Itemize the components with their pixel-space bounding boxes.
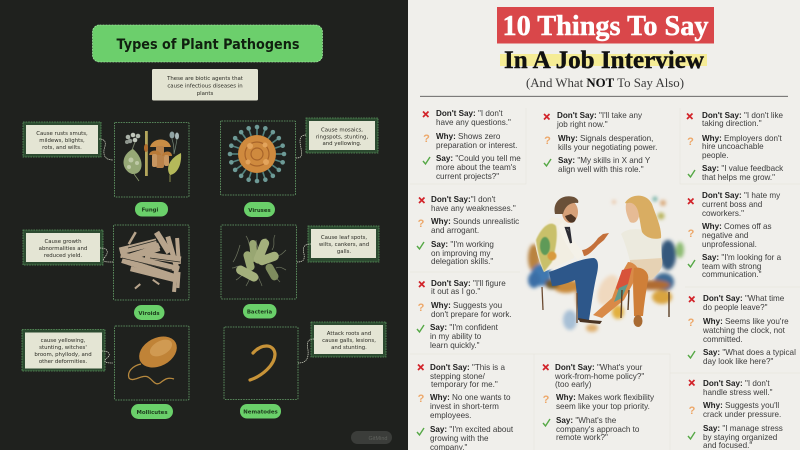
text: align well with this role." xyxy=(558,165,644,174)
man xyxy=(535,196,609,324)
callout: bacteria: wilts, cankers, and xyxy=(319,242,369,248)
callout: mollicutes xyxy=(22,330,105,371)
connector arrow: viruses xyxy=(296,135,306,158)
label: Mollicutes: Mollicutes xyxy=(136,410,168,416)
text: preparation or interest. xyxy=(436,141,517,150)
woman: skirt xyxy=(630,258,662,280)
intro text box xyxy=(152,69,258,100)
callout: fungi: rots, and wilts. xyxy=(42,145,82,151)
text: committed. xyxy=(703,335,743,344)
text: Say: "I manage stress xyxy=(703,424,783,433)
mollicutes group xyxy=(22,326,189,419)
intro text box: cause infectious diseases in xyxy=(167,84,243,90)
text: taking direction." xyxy=(702,119,762,128)
text: Why: Comes off as xyxy=(702,222,772,231)
icons: ? xyxy=(418,302,425,314)
callout: viruses: Cause mosaics, xyxy=(321,128,363,134)
text: Why: Shows zero xyxy=(436,132,501,141)
text: and focused." xyxy=(703,441,752,450)
label: Nematodes xyxy=(240,404,281,418)
panel: plant pathogens xyxy=(0,0,408,450)
text: current projects?" xyxy=(436,172,499,181)
label: Nematodes: Nematodes xyxy=(243,410,278,416)
icons: ? xyxy=(418,218,425,230)
text: Say: "Could you tell me xyxy=(436,154,521,163)
connector arrow: fungi xyxy=(99,139,113,160)
text: and arrogant. xyxy=(431,226,479,235)
text: Say: "What does a typical xyxy=(703,348,796,357)
man: shirt xyxy=(535,217,574,272)
text: seem like your top priority. xyxy=(556,402,650,411)
callout: viroids xyxy=(23,230,103,265)
text: employees. xyxy=(430,411,471,420)
viroids group xyxy=(23,225,189,320)
callout: viroids: reduced yield. xyxy=(44,253,82,259)
text: have any weaknesses." xyxy=(431,204,516,213)
subheading: (And What NOT To Say Also) xyxy=(526,76,684,90)
callout: mollicutes: other deformities. xyxy=(39,359,87,365)
title: Types of Plant Pathogens: Types of Plant Pathogens xyxy=(116,37,300,53)
text: Say: "I'm excited about xyxy=(430,425,514,434)
label: Mollicutes xyxy=(131,404,173,419)
intro text box: plants xyxy=(197,91,213,97)
text: Don't Say:"I don't xyxy=(431,195,496,204)
text: Why: Suggests you'll xyxy=(703,401,779,410)
heading: In A Job Interview: In A Job Interview xyxy=(504,47,704,74)
callout: nematodes: Attack roots and xyxy=(327,331,371,337)
label: Bacteria: Bacteria xyxy=(247,310,273,316)
text: delegation skills." xyxy=(431,257,493,266)
label: Viruses: Viruses xyxy=(248,208,271,214)
text: Say: "My skills in X and Y xyxy=(558,156,651,165)
text: invest in short-term xyxy=(430,402,499,411)
label: Fungi: Fungi xyxy=(142,208,159,214)
text: more about the team's xyxy=(436,163,516,172)
text: Say: "I'm looking for a xyxy=(702,253,782,262)
text: day look like here?" xyxy=(703,357,773,366)
text: Don't Say: "I don't xyxy=(703,379,770,388)
tip card 5 xyxy=(417,279,512,350)
icons: ? xyxy=(688,317,695,329)
text: communication." xyxy=(702,270,762,279)
image box: nematodes xyxy=(224,327,298,400)
man: forearm and hand xyxy=(582,233,609,256)
image box: mollicutes xyxy=(114,326,189,400)
tip card 6 xyxy=(417,363,514,450)
icons: ? xyxy=(689,405,696,417)
callout: mollicutes: cause yellowing, xyxy=(41,338,86,344)
text: team with strong xyxy=(702,262,761,271)
watercolor chairs and splashes xyxy=(528,197,684,332)
callout: bacteria: Cause leaf spots, xyxy=(321,235,367,241)
text xyxy=(703,379,783,450)
text: it out as I go." xyxy=(431,287,480,296)
text xyxy=(436,109,521,181)
text xyxy=(554,363,655,442)
callout: viruses xyxy=(306,118,378,153)
woman: standing leg xyxy=(633,268,648,316)
text: company's approach to xyxy=(556,425,640,434)
label: Fungi xyxy=(135,202,168,216)
text: people. xyxy=(702,151,729,160)
connector arrow: bacteria xyxy=(297,244,311,262)
text: Say: "What's the xyxy=(556,416,617,425)
text: that helps me grow." xyxy=(702,173,775,182)
image box: viroids xyxy=(114,225,189,300)
label: Viruses xyxy=(244,202,275,217)
text: do people leave?" xyxy=(703,303,768,312)
text: Don't Say: "What time xyxy=(703,294,785,303)
tip card 7 xyxy=(543,363,655,442)
text: crack under pressure. xyxy=(703,410,781,419)
label: Bacteria xyxy=(243,304,276,318)
text: unprofessional. xyxy=(702,240,757,249)
woman: face xyxy=(626,203,639,223)
woman: crossed leg xyxy=(593,262,638,318)
intro text box: These are biotic agents that xyxy=(166,76,243,82)
panel: job interview xyxy=(408,0,800,450)
callout: viruses: and yellowing. xyxy=(322,141,362,147)
text: (too early) xyxy=(555,380,592,389)
text: Say: "I value feedback xyxy=(702,164,784,173)
text: negative and xyxy=(702,231,748,240)
callout: fungi xyxy=(23,122,101,157)
text: watching the clock, not xyxy=(702,326,786,335)
text: Why: Employers don't xyxy=(702,134,783,143)
icons: ? xyxy=(544,135,551,147)
icons: ? xyxy=(423,133,430,145)
text: Why: Suggests you xyxy=(431,301,502,310)
callout: viroids: Cause growth xyxy=(44,239,82,245)
label: Viroids xyxy=(134,305,164,320)
icons: ? xyxy=(418,393,425,405)
text xyxy=(556,111,657,174)
woman xyxy=(593,196,669,327)
tip card 2 xyxy=(544,111,657,174)
nematodes group xyxy=(224,322,386,418)
text xyxy=(702,111,784,182)
text: Don't Say: "I'll figure xyxy=(431,279,506,288)
viruses group xyxy=(220,118,378,217)
text: in my ability to xyxy=(430,332,482,341)
watermark: GitMind xyxy=(351,431,392,444)
text: Don't Say: "I don't like xyxy=(702,111,784,120)
text xyxy=(702,191,782,279)
text: Don't Say: "I'll take any xyxy=(557,111,643,120)
callout: mollicutes: broom, phyllody, and xyxy=(34,352,92,358)
tip card 4 xyxy=(417,195,519,266)
watermark: GitMind: GitMind xyxy=(369,436,387,442)
text: temporary for me." xyxy=(431,380,498,389)
text: on improving my xyxy=(431,249,491,258)
text: Why: Sounds unrealistic xyxy=(431,217,519,226)
text: Why: Makes work flexibility xyxy=(556,393,655,402)
text: Don't Say: "I hate my xyxy=(702,191,781,200)
text: Say: "I'm confident xyxy=(430,323,499,332)
callout: nematodes: and stunting. xyxy=(331,345,367,351)
illustration: interview conversation xyxy=(528,196,684,332)
text: growing with the xyxy=(430,434,489,443)
connector arrow: nematodes xyxy=(298,339,314,363)
man: jeans xyxy=(549,258,598,320)
text: Don't Say: "This is a xyxy=(430,363,505,372)
man: head xyxy=(562,201,578,223)
fungi group xyxy=(23,122,189,216)
woman: top xyxy=(621,229,662,262)
text xyxy=(431,195,519,266)
text: Why: No one wants to xyxy=(430,393,511,402)
text: by staying organized xyxy=(703,433,777,442)
callout: bacteria xyxy=(308,226,379,262)
connector arrow: viroids xyxy=(100,248,113,262)
callout: fungi: Cause rusts smuts, xyxy=(36,131,88,137)
tip card 9 xyxy=(688,294,796,366)
callout: fungi: mildews, blights, xyxy=(39,138,85,144)
text xyxy=(430,279,512,350)
text: hire uncoachable xyxy=(702,142,764,151)
callout: viroids: abnormalities and xyxy=(39,246,87,252)
text: Don't Say: "What's your xyxy=(555,363,643,372)
tip card 8 xyxy=(688,191,782,279)
text: work-from-home policy?" xyxy=(554,372,644,381)
text: learn quickly." xyxy=(430,341,480,350)
label: Viroids: Viroids xyxy=(138,311,160,317)
icons: ? xyxy=(687,136,694,148)
text: current boss and xyxy=(702,200,762,209)
woman: hair xyxy=(625,196,661,239)
text: job right now." xyxy=(556,120,608,129)
text: handle stress well." xyxy=(703,388,773,397)
text: remote work?" xyxy=(556,433,608,442)
icons: ? xyxy=(688,228,695,240)
text xyxy=(702,294,796,366)
text xyxy=(430,363,514,450)
callout: mollicutes: stunting, witches' xyxy=(39,345,87,351)
tip card 3 xyxy=(687,111,784,182)
text: Why: Signals desperation, xyxy=(558,134,653,143)
title: Types of Plant Pathogens xyxy=(92,25,322,62)
icons: ? xyxy=(543,394,550,406)
title banner: 10 Things To Say: 10 Things To Say xyxy=(502,11,708,42)
bacteria group xyxy=(221,225,379,318)
text: have any questions." xyxy=(436,118,511,127)
text: kills your negotiating power. xyxy=(558,143,657,152)
callout: bacteria: galls. xyxy=(337,249,351,255)
callout: viruses: ringspots, stunting, xyxy=(316,134,368,140)
callout: nematodes xyxy=(311,322,386,357)
connector arrow: mollicutes xyxy=(102,351,113,363)
text: don't prepare for work. xyxy=(431,310,512,319)
callout: nematodes: cause galls, lesions, xyxy=(322,338,376,344)
tip card 1 xyxy=(423,109,521,181)
text: stepping stone/ xyxy=(430,372,486,381)
image box: fungi xyxy=(114,122,189,197)
image box: bacteria xyxy=(221,225,296,299)
text: Say: "I'm working xyxy=(431,240,494,249)
image box: viruses xyxy=(220,121,296,195)
tip card 10 xyxy=(688,379,783,450)
text: coworkers." xyxy=(702,209,744,218)
text: Don't Say: "I don't xyxy=(436,109,503,118)
text: Why: Seems like you're xyxy=(703,317,789,326)
